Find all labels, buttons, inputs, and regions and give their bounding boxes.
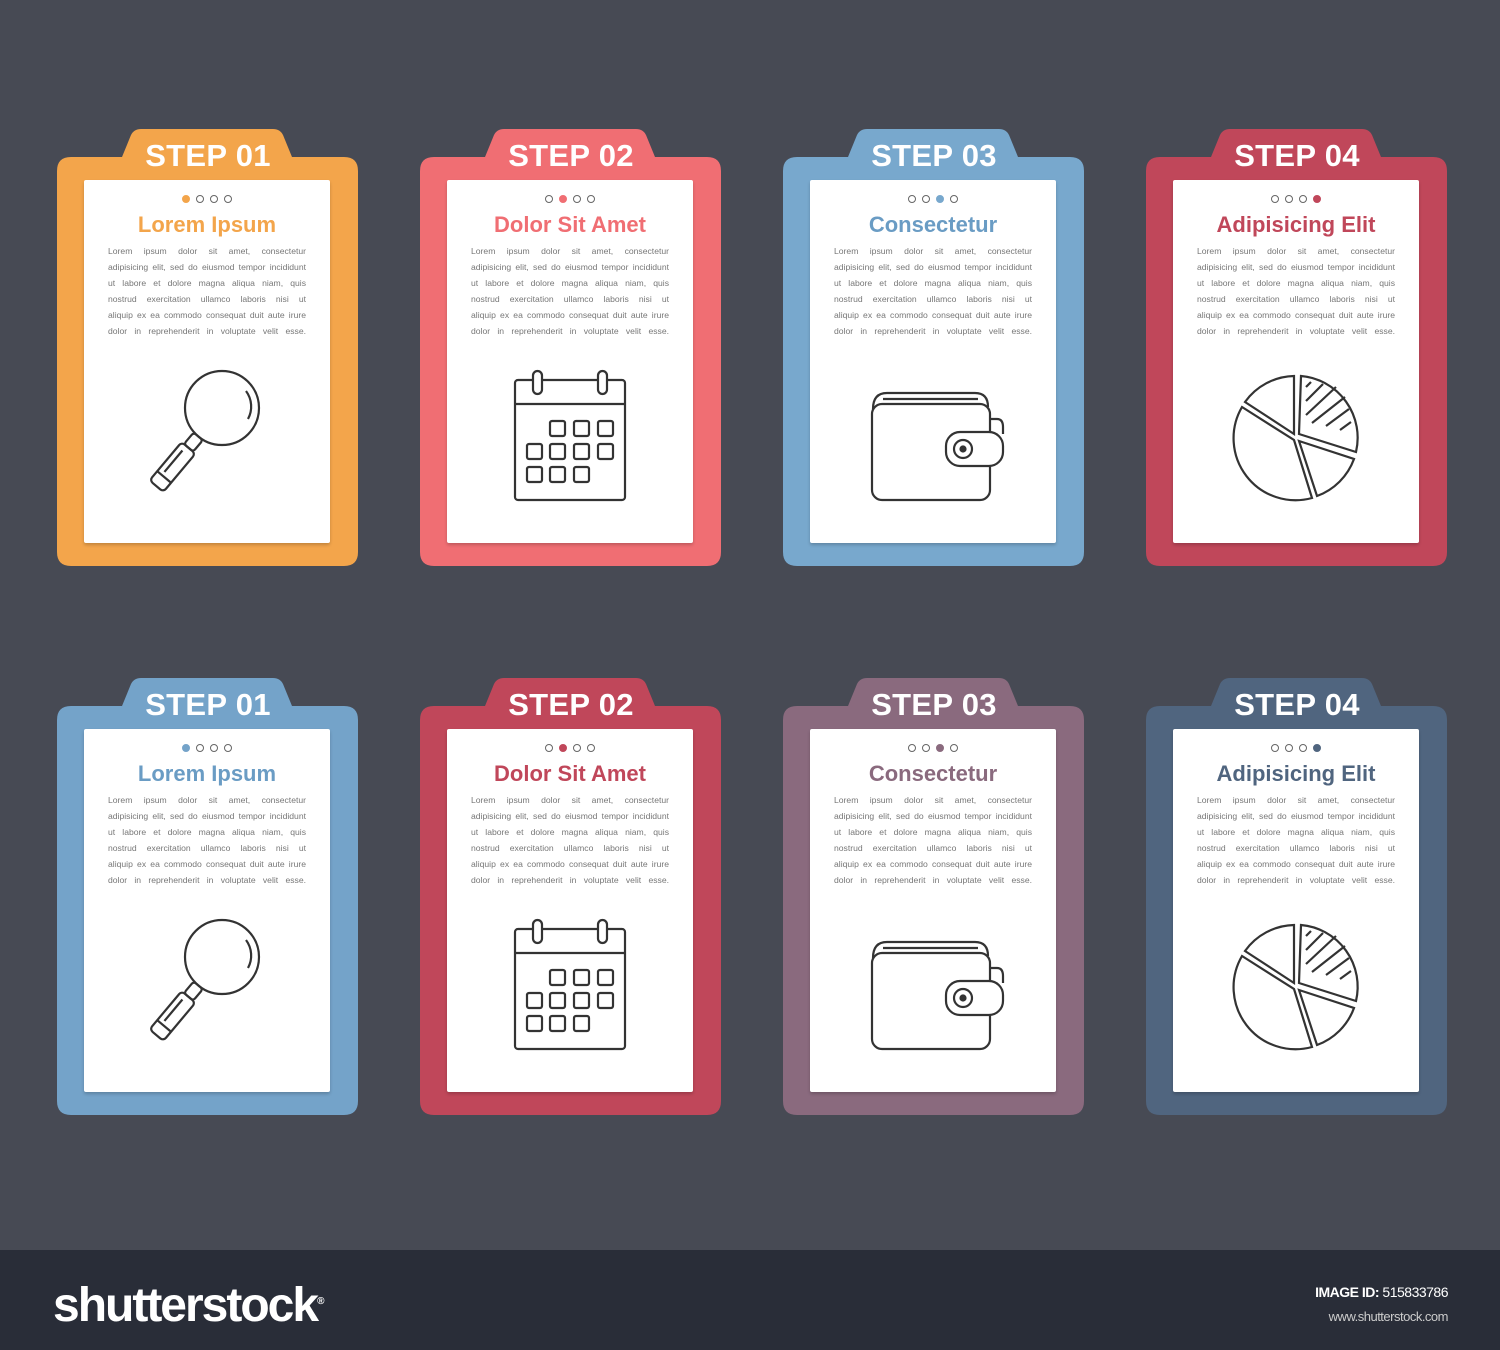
icon: wallet [870, 392, 1004, 502]
body text: nostrud exercitation ullamco laboris nisi ut [108, 294, 306, 304]
step label: STEP 01 [145, 687, 271, 722]
body text: Lorem ipsum dolor sit amet, consectetur [108, 795, 306, 805]
card: step 01 orange [57, 129, 358, 566]
step label: STEP 01 [145, 138, 271, 173]
body text: dolor in reprehenderit in voluptate velit esse. [108, 875, 306, 885]
body text: adipisicing elit, sed do eiusmod tempor incididunt [108, 262, 306, 272]
body text: aliquip ex ea commodo consequat duit aute irure [108, 310, 306, 320]
footer image id: www.shutterstock.com [1329, 1309, 1448, 1324]
icon: calendar [514, 918, 626, 1050]
body text: adipisicing elit, sed do eiusmod tempor incididunt [471, 262, 669, 272]
body text: nostrud exercitation ullamco laboris nisi ut [108, 843, 306, 853]
heading: Consectetur [869, 212, 997, 237]
body text: nostrud exercitation ullamco laboris nisi ut [834, 843, 1032, 853]
body text: Lorem ipsum dolor sit amet, consectetur [834, 795, 1032, 805]
body text: aliquip ex ea commodo consequat duit aute irure [471, 310, 669, 320]
body text: ut labore et dolore magna aliqua niam, quis [471, 827, 669, 837]
progress dots [182, 744, 232, 752]
body text: aliquip ex ea commodo consequat duit aute irure [834, 310, 1032, 320]
body text: dolor in reprehenderit in voluptate velit esse. [834, 875, 1032, 885]
body text [1197, 795, 1395, 885]
body text: adipisicing elit, sed do eiusmod tempor incididunt [471, 811, 669, 821]
progress dots [545, 195, 595, 203]
body text: adipisicing elit, sed do eiusmod tempor incididunt [834, 262, 1032, 272]
body text: adipisicing elit, sed do eiusmod tempor incididunt [834, 811, 1032, 821]
body text: ut labore et dolore magna aliqua niam, quis [108, 827, 306, 837]
icon: calendar [514, 370, 626, 502]
inner panel [447, 729, 693, 1092]
body text: nostrud exercitation ullamco laboris nisi ut [834, 294, 1032, 304]
inner panel [1173, 729, 1419, 1092]
step label: STEP 04 [1234, 687, 1360, 722]
heading: Adipisicing Elit [1217, 761, 1375, 786]
icon: pie chart [1232, 374, 1359, 502]
body text: adipisicing elit, sed do eiusmod tempor incididunt [1197, 262, 1395, 272]
body text: nostrud exercitation ullamco laboris nisi ut [471, 294, 669, 304]
heading: Lorem Ipsum [138, 212, 276, 237]
step label: STEP 02 [508, 138, 634, 173]
body text [834, 795, 1032, 885]
heading: Lorem Ipsum [138, 761, 276, 786]
inner panel [810, 180, 1056, 543]
body text: adipisicing elit, sed do eiusmod tempor incididunt [1197, 811, 1395, 821]
body text: Lorem ipsum dolor sit amet, consectetur [471, 246, 669, 256]
body text: ut labore et dolore magna aliqua niam, quis [1197, 278, 1395, 288]
progress dots [182, 195, 232, 203]
progress dots [1271, 744, 1321, 752]
footer logo: shutterstock® [53, 1279, 322, 1332]
body text [108, 795, 306, 885]
body text [834, 246, 1032, 336]
body text: Lorem ipsum dolor sit amet, consectetur [108, 246, 306, 256]
body text: Lorem ipsum dolor sit amet, consectetur [471, 795, 669, 805]
inner panel [447, 180, 693, 543]
body text: aliquip ex ea commodo consequat duit aute irure [1197, 310, 1395, 320]
body text: ut labore et dolore magna aliqua niam, quis [834, 278, 1032, 288]
body text: Lorem ipsum dolor sit amet, consectetur [834, 246, 1032, 256]
card: step 02 red (row 2) [420, 678, 721, 1115]
inner panel [84, 180, 330, 543]
body text: dolor in reprehenderit in voluptate velit esse. [471, 875, 669, 885]
body text: Lorem ipsum dolor sit amet, consectetur [1197, 795, 1395, 805]
body text [1197, 246, 1395, 336]
body text: ut labore et dolore magna aliqua niam, quis [108, 278, 306, 288]
body text: dolor in reprehenderit in voluptate velit esse. [1197, 875, 1395, 885]
heading: Consectetur [869, 761, 997, 786]
body text: Lorem ipsum dolor sit amet, consectetur [1197, 246, 1395, 256]
heading: Dolor Sit Amet [494, 212, 646, 237]
body text: aliquip ex ea commodo consequat duit aute irure [834, 859, 1032, 869]
body text [471, 246, 669, 336]
body text: ut labore et dolore magna aliqua niam, quis [834, 827, 1032, 837]
body text: dolor in reprehenderit in voluptate velit esse. [471, 326, 669, 336]
body text: aliquip ex ea commodo consequat duit aute irure [108, 859, 306, 869]
progress dots [1271, 195, 1321, 203]
card: step 04 red [1146, 129, 1447, 566]
body text: nostrud exercitation ullamco laboris nisi ut [1197, 294, 1395, 304]
footer bar [0, 1250, 1500, 1350]
card: step 02 pink [420, 129, 721, 566]
icon: magnifier [150, 918, 260, 1040]
body text: dolor in reprehenderit in voluptate velit esse. [108, 326, 306, 336]
heading: Adipisicing Elit [1217, 212, 1375, 237]
progress dots [545, 744, 595, 752]
progress dots [908, 195, 958, 203]
card: step 01 blue (row 2) [57, 678, 358, 1115]
footer image id [1315, 1284, 1448, 1324]
heading: Dolor Sit Amet [494, 761, 646, 786]
body text: aliquip ex ea commodo consequat duit aute irure [1197, 859, 1395, 869]
body text [471, 795, 669, 885]
inner panel [84, 729, 330, 1092]
body text: nostrud exercitation ullamco laboris nisi ut [471, 843, 669, 853]
inner panel [1173, 180, 1419, 543]
body text: adipisicing elit, sed do eiusmod tempor incididunt [108, 811, 306, 821]
body text: dolor in reprehenderit in voluptate velit esse. [1197, 326, 1395, 336]
icon: magnifier [150, 370, 260, 492]
card: step 04 slate (row 2) [1146, 678, 1447, 1115]
body text [108, 246, 306, 336]
step label: STEP 04 [1234, 138, 1360, 173]
progress dots [908, 744, 958, 752]
body text: ut labore et dolore magna aliqua niam, quis [471, 278, 669, 288]
step label: STEP 03 [871, 687, 997, 722]
inner panel [810, 729, 1056, 1092]
body text: ut labore et dolore magna aliqua niam, quis [1197, 827, 1395, 837]
body text: nostrud exercitation ullamco laboris nisi ut [1197, 843, 1395, 853]
footer image id: IMAGE ID: 515833786 [1315, 1284, 1448, 1300]
body text: aliquip ex ea commodo consequat duit aute irure [471, 859, 669, 869]
step label: STEP 02 [508, 687, 634, 722]
icon: pie chart [1232, 924, 1359, 1050]
icon: wallet [870, 940, 1004, 1050]
card: step 03 mauve (row 2) [783, 678, 1084, 1115]
step label: STEP 03 [871, 138, 997, 173]
card: step 03 blue [783, 129, 1084, 566]
body text: dolor in reprehenderit in voluptate velit esse. [834, 326, 1032, 336]
